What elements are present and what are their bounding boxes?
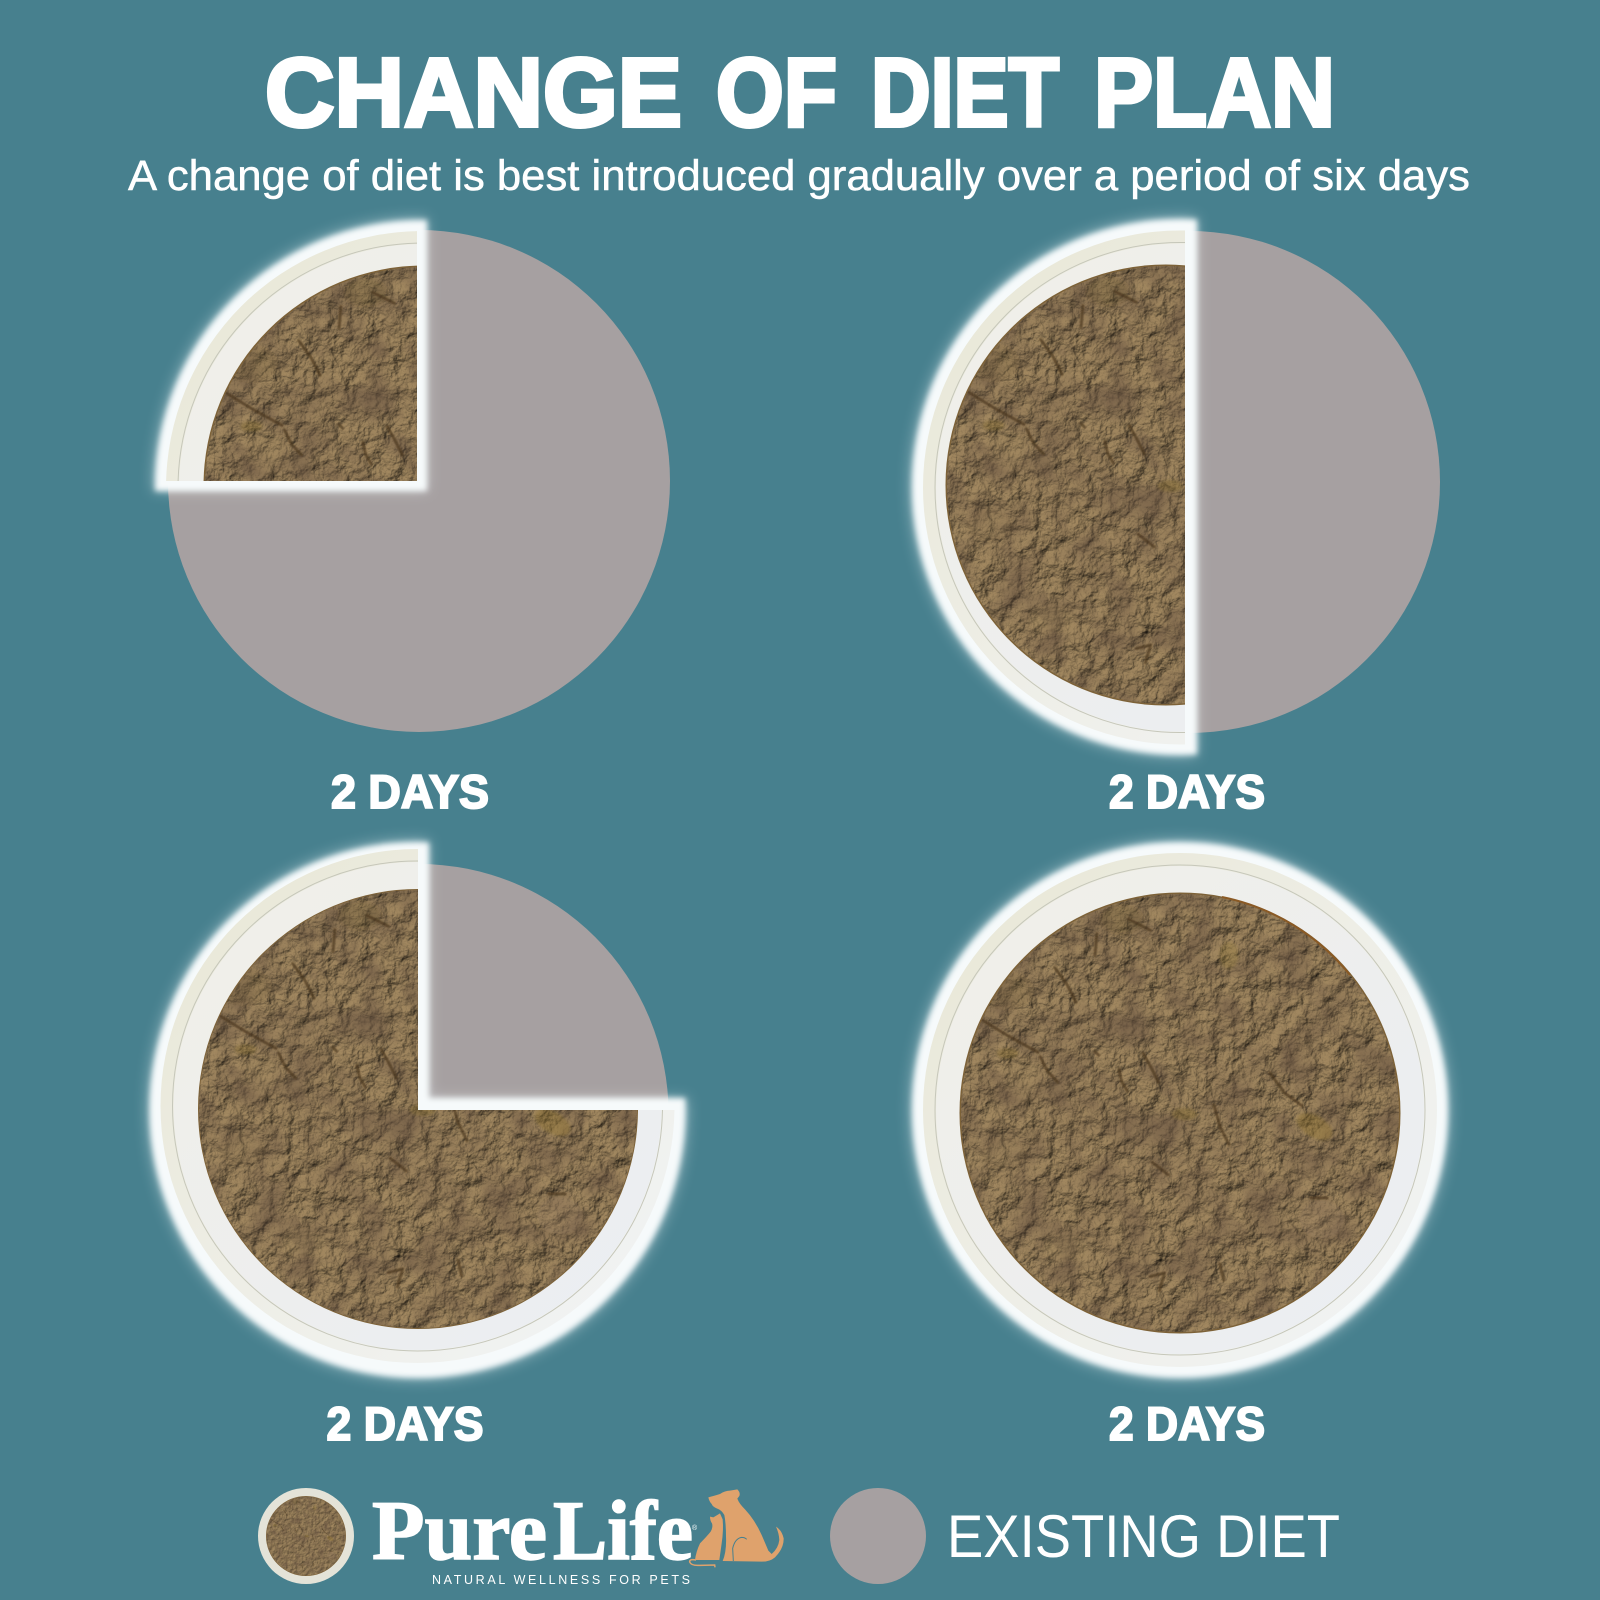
white glow outline — [146, 210, 435, 499]
label: stage 1 duration: 2 DAYS — [331, 765, 489, 818]
bowl half — [923, 230, 1185, 744]
logo: Pure Life wordmark — [372, 1484, 698, 1587]
logo: Pure Life wordmark: Life — [553, 1484, 693, 1578]
panel: stage 2, half new food — [910, 217, 1450, 757]
existing diet sector — [426, 864, 668, 1101]
panel: stage 4, all new food — [910, 840, 1450, 1380]
white glow outline — [910, 840, 1450, 1380]
logo: Pure Life wordmark: NATURAL WELLNESS FOR PETS — [432, 1573, 690, 1587]
legend: new food — [258, 1484, 784, 1587]
white glow outline — [148, 840, 688, 1380]
bowl three quarters — [160, 849, 674, 1363]
legend: existing diet — [830, 1488, 1340, 1584]
title: DIET — [871, 38, 1059, 147]
icon: small bowl — [258, 1488, 354, 1584]
subtitle: A change of diet is best introduced gradually over a period of six days — [128, 152, 1470, 200]
icon: grey circle — [830, 1488, 926, 1584]
full bowl — [923, 853, 1437, 1367]
existing diet half — [1194, 231, 1440, 733]
existing diet sector — [168, 230, 670, 732]
icon: dog and cat logo — [690, 1489, 784, 1567]
logo: Pure Life wordmark: Pure — [372, 1484, 547, 1578]
white glow outline — [902, 209, 1205, 765]
title: OF — [716, 38, 837, 147]
legend label: EXISTING DIET — [947, 1503, 1340, 1570]
title: CHANGE — [265, 38, 682, 147]
title — [265, 38, 1335, 147]
bowl quarter — [166, 231, 417, 481]
panel: stage 3, three quarters new food — [148, 840, 688, 1380]
label: stage 4 duration: 2 DAYS — [1109, 1397, 1265, 1450]
title: PLAN — [1094, 38, 1335, 147]
logo: Pure Life wordmark: ® — [692, 1524, 698, 1532]
label: stage 3 duration: 2 DAYS — [326, 1397, 484, 1450]
panel: stage 1, quarter new food — [153, 218, 693, 758]
label: stage 2 duration: 2 DAYS — [1109, 765, 1265, 818]
